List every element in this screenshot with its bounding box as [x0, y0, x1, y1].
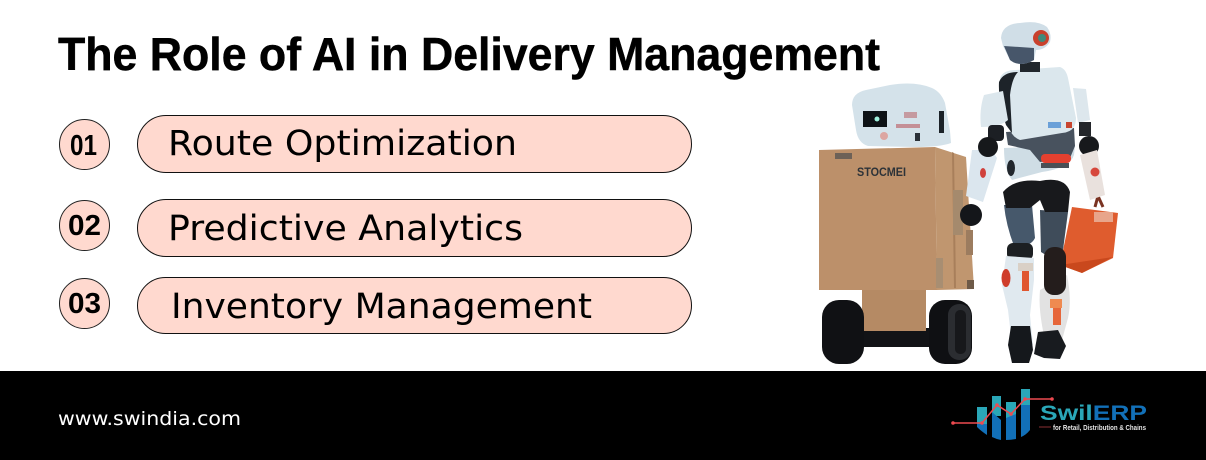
logo tagline: for Retail, Distribution & Chains: [1053, 425, 1146, 432]
cardboard box: [819, 147, 974, 290]
list item 2: predictive analytics: Predictive Analytics: [168, 209, 523, 249]
head: [1001, 22, 1051, 72]
list item 1: route optimization: 01: [70, 130, 97, 162]
upper legs: [1004, 205, 1035, 246]
list item 2: predictive analytics: 02: [68, 210, 101, 242]
list item 1: route optimization: Route Optimization: [168, 124, 517, 164]
chest plate: [999, 67, 1076, 140]
illustration: delivery cart with box: [819, 84, 974, 364]
cart lower box: [862, 290, 926, 331]
cart chassis: [860, 328, 932, 347]
list item 3: inventory management: Inventory Management: [171, 287, 592, 327]
website url: www.swindia.com: [58, 408, 241, 430]
list item 2: predictive analytics: [60, 200, 692, 256]
legs: [1002, 205, 1070, 363]
logo wordmark: Swil ERP: [1040, 402, 1147, 425]
hips: [1003, 180, 1070, 212]
left arm: [960, 91, 1008, 226]
list item 3: inventory management: 03: [68, 288, 101, 320]
left shin: [1002, 256, 1034, 345]
logo: SwilERP: [951, 389, 1147, 440]
left knee: [1007, 243, 1033, 260]
right arm: [1073, 88, 1105, 200]
footer bar: [0, 371, 1206, 460]
logo bars: [977, 389, 1030, 440]
list item 3: inventory management: [60, 278, 692, 334]
logo trend line: [951, 397, 1054, 425]
cart top device: [852, 84, 951, 147]
list item 1: route optimization: [60, 116, 692, 172]
title: The Role of AI in Delivery Management: [58, 28, 880, 80]
illustration: walking robot: [960, 22, 1118, 363]
right shin: [1040, 275, 1070, 340]
feet: [1008, 326, 1033, 363]
orange carried bag: [1060, 196, 1118, 273]
cart wheels: [822, 300, 972, 364]
pelvis: [1004, 128, 1075, 180]
cardboard box: STOCMEI: [857, 167, 906, 179]
